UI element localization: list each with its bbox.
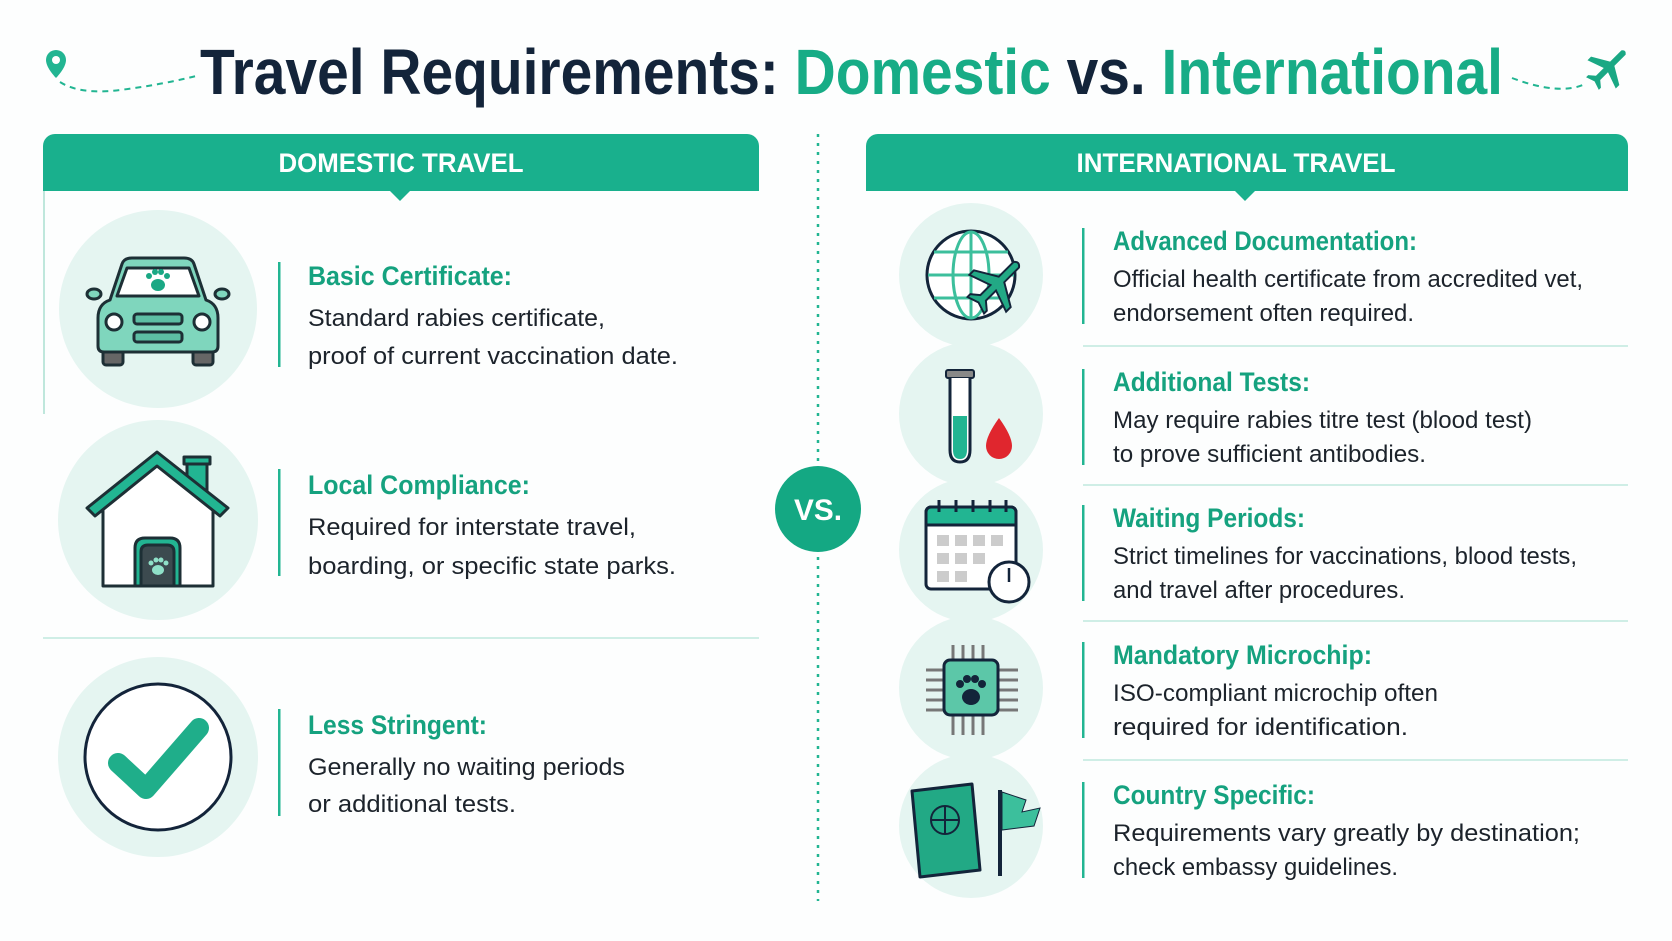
item: country specific: check embassy guidelines. [1113,854,1398,881]
item: country specific [912,780,1580,881]
item: advanced documentation: Official health certificate from accredited vet, [1113,266,1583,293]
item: less stringent: Generally no waiting periods [308,754,625,781]
header: domestic: DOMESTIC TRAVEL [278,148,524,178]
item: mandatory microchip: required for identification. [1113,714,1408,741]
item: advanced documentation: Advanced Documentation: [1113,226,1417,256]
item: additional tests: May require rabies titre test (blood test) [1113,407,1532,434]
item: additional tests [946,367,1532,468]
icon: location pin [46,50,196,91]
item: advanced documentation: endorsement often required. [1113,300,1414,327]
item: mandatory microchip: Mandatory Microchip: [1113,640,1372,670]
item: waiting periods: and travel after procedures. [1113,577,1405,604]
item: waiting periods [926,500,1577,604]
item: local compliance [58,420,676,620]
icon: calendar and clock [926,500,1029,602]
vs badge [775,466,861,552]
icon: check [85,684,231,830]
icon: microchip [926,645,1018,735]
item: basic certificate: Standard rabies certificate, [308,305,605,332]
icon: plane [1512,37,1639,98]
item: additional tests: Additional Tests: [1113,367,1310,397]
icon: house [87,452,228,586]
item: basic certificate [59,210,678,408]
center dotted divider [817,134,819,901]
item: waiting periods: Waiting Periods: [1113,503,1305,533]
icon: globe with plane [927,231,1036,324]
item: local compliance: Local Compliance: [308,470,530,500]
icon: test tube and drop [946,370,1012,462]
header: international [866,134,1628,201]
item: mandatory microchip: ISO-compliant microchip often [1113,680,1438,707]
item: advanced documentation [927,226,1583,327]
item: country specific: Country Specific: [1113,780,1315,810]
item: mandatory microchip [926,640,1438,741]
item: less stringent: Less Stringent: [308,710,487,740]
vs badge: VS. [794,494,842,527]
item: less stringent: or additional tests. [308,791,516,818]
panel: domestic travel [43,134,759,857]
item: waiting periods: Strict timelines for vaccinations, blood tests, [1113,543,1577,570]
icon: passport and flag [912,784,1040,877]
item: local compliance: boarding, or specific state parks. [308,553,676,580]
item: country specific: Requirements vary greatly by destination; [1113,820,1580,847]
item: local compliance: Required for interstate travel, [308,514,636,541]
panel: international travel [866,134,1628,898]
item: basic certificate: proof of current vaccination date. [308,343,678,370]
item: less stringent [58,657,625,857]
header: domestic [43,134,759,201]
item: basic certificate: Basic Certificate: [308,261,512,291]
title: Travel Requirements: Domestic vs. International [200,36,1503,108]
header: international: INTERNATIONAL TRAVEL [1076,148,1396,178]
item: additional tests: to prove sufficient antibodies. [1113,441,1426,468]
icon: car [87,258,229,365]
